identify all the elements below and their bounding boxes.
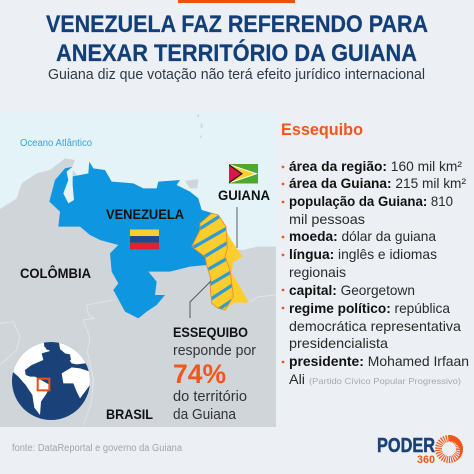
fact list: moeda: dólar da guiana bbox=[289, 228, 436, 244]
label: Venezuela: VENEZUELA bbox=[106, 206, 184, 222]
logo: Poder360: 360 bbox=[417, 454, 435, 466]
fact list bbox=[289, 158, 469, 387]
fact list: (Partido Cívico Popular Progressivo) bbox=[309, 376, 461, 386]
panel: map bbox=[0, 112, 277, 438]
land: neighbouring countries bbox=[0, 114, 277, 438]
fact list: área da Guiana: 215 mil km² bbox=[289, 175, 466, 191]
source note: fonte: DataReportal e governo da Guiana bbox=[12, 443, 182, 454]
fact list: capital: Georgetown bbox=[289, 282, 415, 298]
callout: Essequibo 74%: responde por bbox=[173, 342, 256, 359]
leader line: Essequibo bbox=[190, 281, 211, 318]
fact list: área da região: 160 mil km² bbox=[289, 158, 462, 174]
panel heading: Essequibo bbox=[281, 120, 363, 139]
title: ANEXAR TERRITÓRIO DA GUIANA bbox=[56, 39, 417, 67]
callout: Essequibo 74%: da Guiana bbox=[173, 406, 237, 423]
fact list: língua: inglês e idiomas bbox=[289, 246, 437, 262]
logo: Poder360: PODER bbox=[377, 435, 435, 457]
title: VENEZUELA FAZ REFERENDO PARA bbox=[46, 11, 428, 38]
label: ocean: Oceano Atlântico bbox=[20, 138, 92, 149]
callout: Essequibo 74%: ESSEQUIBO bbox=[173, 324, 248, 340]
label: Brasil: BRASIL bbox=[106, 406, 153, 422]
bullets bbox=[282, 166, 284, 363]
fact list: mil pessoas bbox=[289, 211, 365, 227]
subtitle: Guiana diz que votação não terá efeito jurídico internacional bbox=[48, 67, 425, 83]
title bbox=[46, 11, 428, 67]
fact list: população da Guiana: 810 bbox=[289, 193, 453, 209]
Venezuela bbox=[49, 162, 220, 318]
leader line: Guiana bbox=[236, 207, 238, 248]
flag: Venezuela bbox=[130, 230, 159, 249]
borders between countries bbox=[0, 295, 277, 425]
panel: Essequibo facts bbox=[281, 120, 469, 387]
Guyana bbox=[190, 213, 249, 311]
callout: Essequibo 74%: do território bbox=[173, 388, 247, 405]
fact list: presidencialista bbox=[289, 335, 388, 351]
label: Colombia: COLÔMBIA bbox=[20, 264, 91, 281]
logo: Poder360 bbox=[377, 435, 463, 466]
fact list: regionais bbox=[289, 264, 346, 280]
locator globe bbox=[12, 342, 90, 420]
callout: Essequibo 74% bbox=[173, 324, 256, 423]
fact list: presidente: Mohamed Irfaan bbox=[289, 353, 469, 369]
label: Guiana: GUIANA bbox=[218, 187, 270, 203]
Lake Maracaibo bbox=[63, 167, 74, 203]
fact list: Ali bbox=[289, 371, 305, 387]
fact list: democrática representativa bbox=[289, 318, 461, 334]
Essequibo striped region bbox=[190, 213, 234, 311]
top accent bar bbox=[178, 0, 295, 3]
callout: Essequibo 74%: 74% bbox=[173, 359, 226, 389]
flag: Guyana bbox=[229, 164, 258, 184]
fact list: regime político: república bbox=[289, 300, 450, 316]
